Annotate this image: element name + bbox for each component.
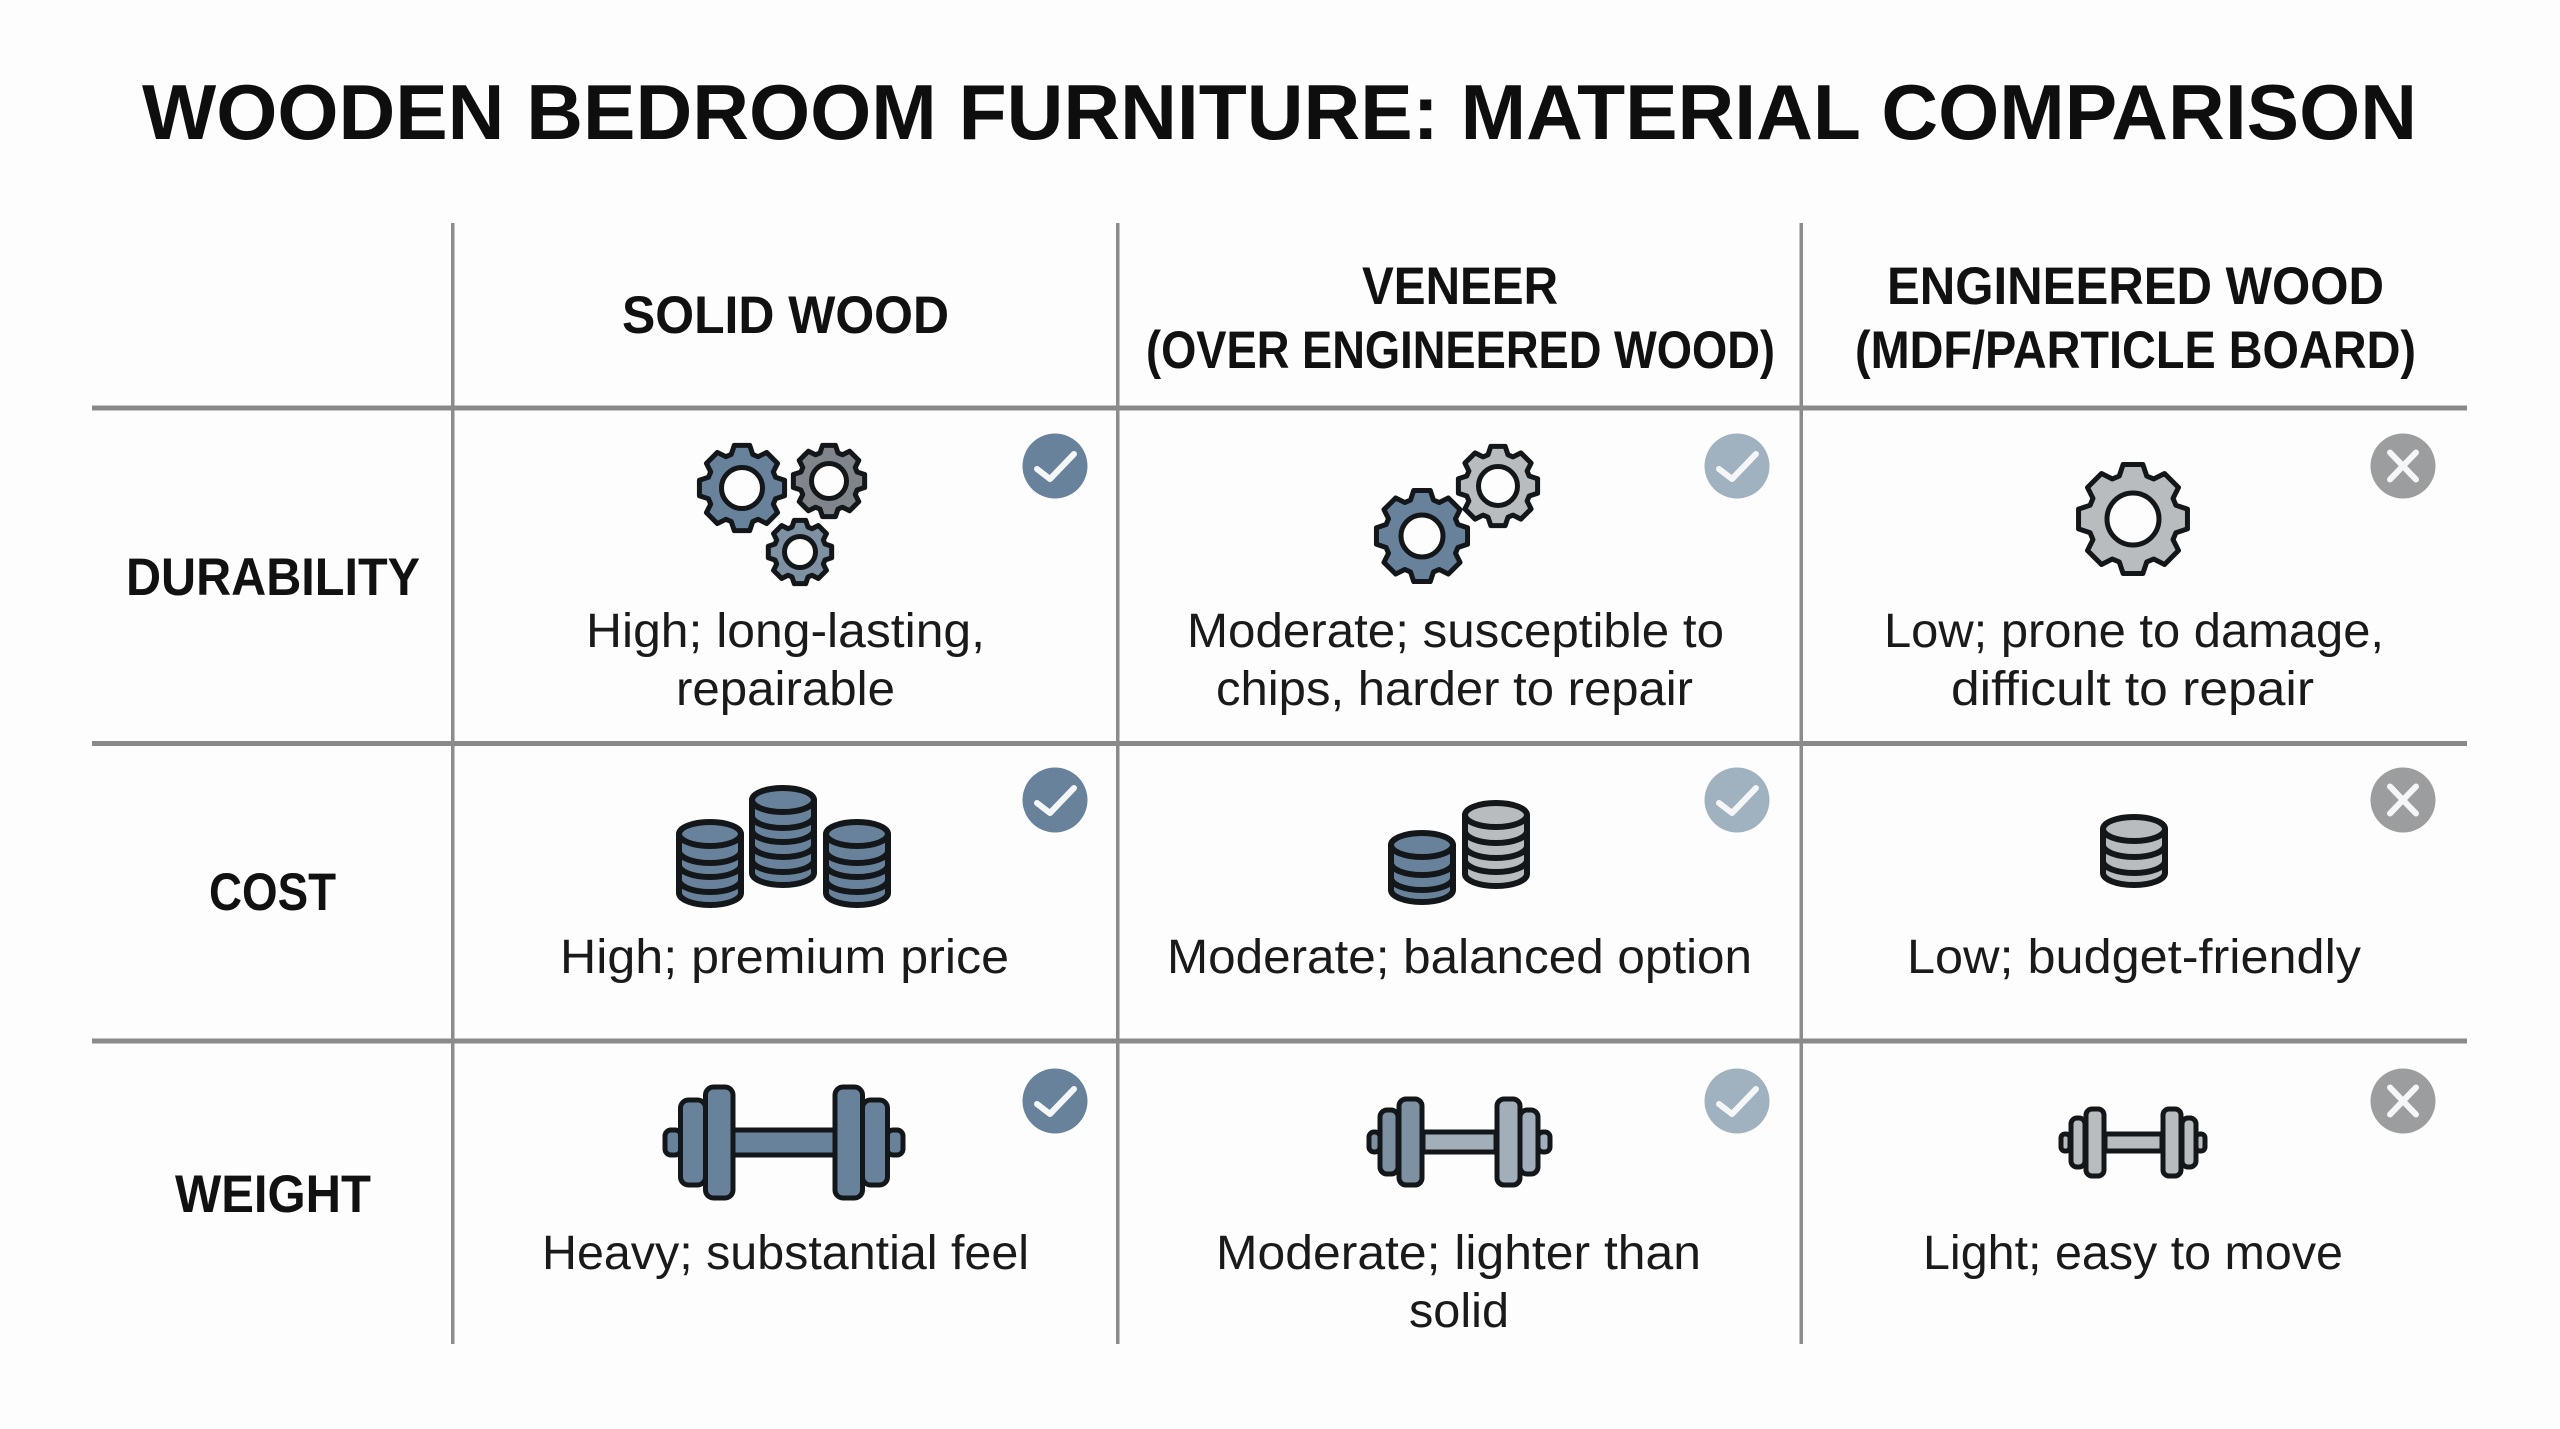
icon: medium dumbbell <box>1369 1099 1550 1185</box>
header: veneer: (OVER ENGINEERED WOOD) <box>1146 321 1775 380</box>
row label: cost: COST <box>209 863 336 922</box>
check badge <box>1704 434 1770 498</box>
text: repairable <box>676 663 895 716</box>
text: Moderate; susceptible to <box>1187 605 1724 658</box>
text: chips, harder to repair <box>1216 663 1693 716</box>
header: veneer: VENEER <box>1362 257 1558 316</box>
icon: one gear <box>2079 465 2187 573</box>
text: Low; budget-friendly <box>1907 931 2361 984</box>
text: High; premium price <box>560 931 1009 984</box>
cell: veneer weight <box>1216 1068 1770 1338</box>
column headers <box>622 257 2416 380</box>
icon: large dumbbell <box>665 1087 903 1198</box>
text: Light; easy to move <box>1923 1227 2343 1280</box>
title: WOODEN BEDROOM FURNITURE: MATERIAL COMPARISON <box>142 68 2417 156</box>
text <box>586 605 985 716</box>
cross badge <box>2370 434 2436 498</box>
cell: solid wood durability <box>586 434 1088 716</box>
cell: engineered weight <box>1923 1068 2436 1280</box>
text <box>1884 605 2384 716</box>
icon: three gears <box>699 445 865 584</box>
cross badge <box>2370 1068 2436 1134</box>
icon: two coin stacks <box>1391 803 1527 902</box>
icon: three coin stacks <box>679 788 888 905</box>
text: difficult to repair <box>1951 663 2314 716</box>
check badge <box>1704 768 1770 832</box>
cell: engineered durability <box>1884 434 2436 716</box>
text: solid <box>1409 1285 1509 1338</box>
cell: veneer cost <box>1167 768 1770 984</box>
check badge <box>1022 434 1088 498</box>
text <box>1216 1227 1701 1338</box>
check badge <box>1704 1068 1770 1134</box>
text: Moderate; balanced option <box>1167 931 1752 984</box>
header: veneer <box>1146 257 1775 380</box>
row labels <box>126 548 420 1224</box>
check badge <box>1022 1068 1088 1134</box>
cell: engineered cost <box>1907 768 2436 984</box>
text: Low; prone to damage, <box>1884 605 2384 658</box>
check badge <box>1022 768 1088 832</box>
row label: weight: WEIGHT <box>175 1165 371 1224</box>
text <box>1187 605 1724 716</box>
text: Moderate; lighter than <box>1216 1227 1701 1280</box>
cell: veneer durability <box>1187 434 1770 716</box>
cross badge <box>2370 768 2436 832</box>
icon: two gears <box>1376 446 1538 582</box>
cell: solid wood cost <box>560 768 1088 984</box>
icon: small dumbbell <box>2061 1109 2205 1176</box>
header: engineered wood: (MDF/PARTICLE BOARD) <box>1855 321 2416 380</box>
header: engineered wood: ENGINEERED WOOD <box>1887 257 2384 316</box>
row label: durability: DURABILITY <box>126 548 420 607</box>
icon: one coin stack <box>2103 817 2165 885</box>
header: solid wood: SOLID WOOD <box>622 286 949 345</box>
header: engineered wood <box>1855 257 2416 380</box>
text: High; long-lasting, <box>586 605 985 658</box>
cell: solid wood weight <box>542 1068 1088 1280</box>
text: Heavy; substantial feel <box>542 1227 1029 1280</box>
